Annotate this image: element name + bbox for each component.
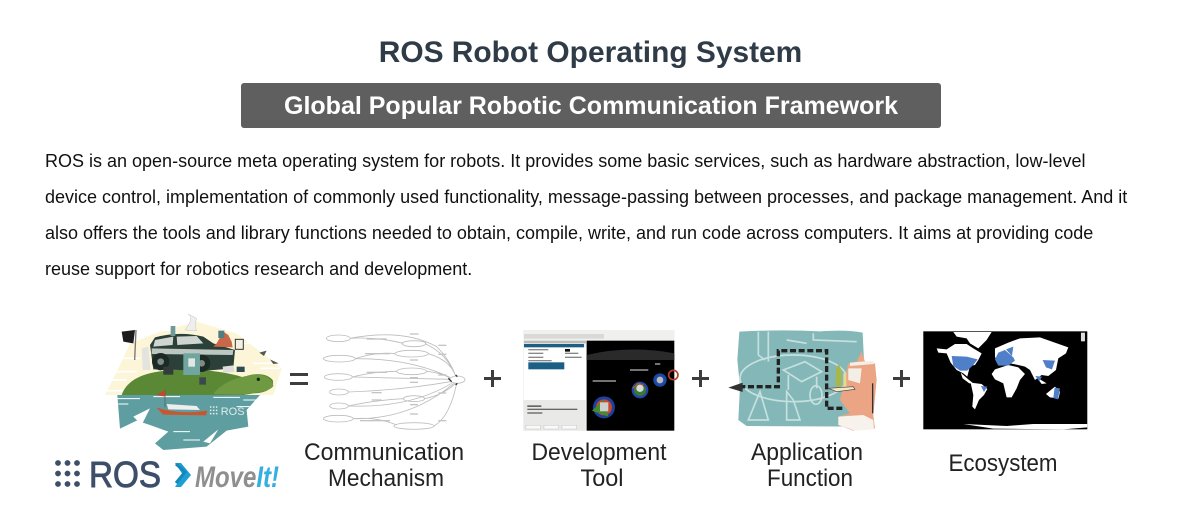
icon: ROS turtle illustration (102, 314, 283, 450)
chart: ecosystem world map (923, 331, 1087, 429)
label: Development Tool: Development (532, 439, 667, 466)
label: Development Tool: Tool (580, 465, 624, 492)
label: Application Function: Function (767, 465, 853, 492)
intro paragraph: also offers the tools and library functions needed to obtain, compile, write, and run code across computers. It aims at providing code (45, 223, 1093, 243)
label: Application Function: Application (751, 439, 863, 466)
intro paragraph: ROS is an open-source meta operating system for robots. It provides some basic services, such as hardware abstraction, low-level (45, 151, 1085, 171)
plus sign 3 (893, 370, 910, 387)
logo: MoveIt: MoveIt! (195, 461, 279, 494)
icon: ROS turtle illustration: ROS (221, 406, 245, 418)
plus sign 1 (484, 370, 501, 387)
logo: ROS: ROS (89, 454, 161, 495)
plus sign 2 (692, 370, 709, 387)
label: Communication Mechanism: Mechanism (328, 465, 444, 492)
chart: communication node graph (323, 333, 465, 429)
subtitle banner (241, 83, 941, 128)
label: Ecosystem: Ecosystem (948, 450, 1058, 477)
icon: application function illustration (728, 330, 880, 433)
intro paragraph (45, 151, 1128, 279)
intro paragraph: reuse support for robotics research and development. (45, 259, 472, 279)
intro paragraph: device control, implementation of commonly used functionality, message-passing between processes, and package management. And it (45, 187, 1127, 207)
logo: ROS (55, 454, 161, 495)
equals sign (290, 373, 308, 385)
icon: development tool screenshot (523, 330, 678, 431)
subtitle banner: Global Popular Robotic Communication Framework (284, 92, 898, 120)
title: ROS Robot Operating System (379, 36, 802, 69)
label: Communication Mechanism: Communication (304, 439, 464, 466)
